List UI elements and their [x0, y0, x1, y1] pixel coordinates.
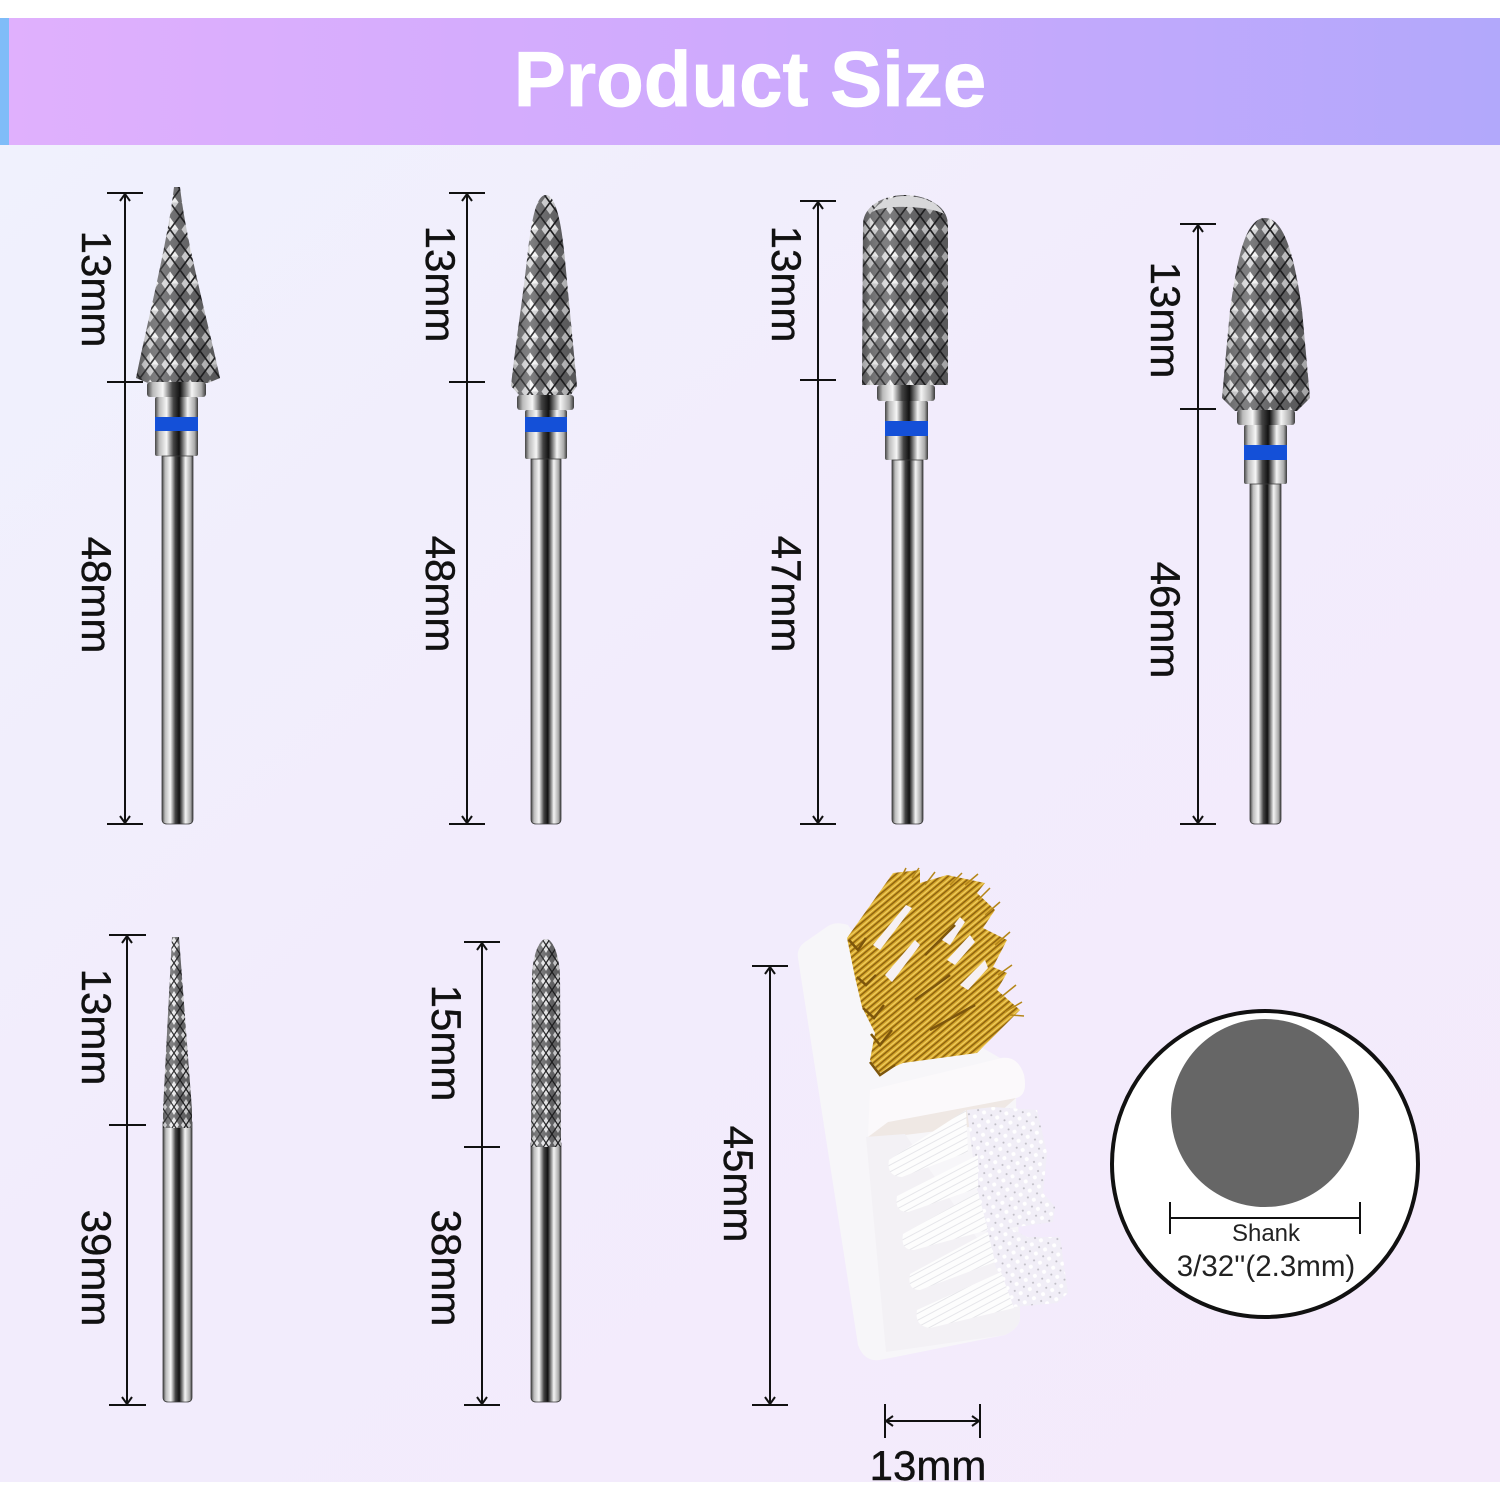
label: 15mm: 15mm	[423, 985, 470, 1101]
drill bit 5: needle	[163, 937, 192, 1402]
drill bit 6: slim cylinder	[531, 939, 561, 1402]
brush neck overhang	[868, 1058, 1025, 1137]
label: 39mm: 39mm	[73, 1210, 120, 1326]
gold bristle gaps	[873, 905, 988, 990]
label: 13mm: 13mm	[417, 226, 464, 342]
label: 47mm: 47mm	[763, 536, 810, 652]
nylon bristles	[889, 1110, 1014, 1328]
label: 13mm: 13mm	[763, 226, 810, 342]
gold bristle tips	[900, 868, 1024, 1016]
translucent bristle tips	[967, 1107, 1068, 1307]
lower plate	[866, 1134, 1020, 1352]
label: 13mm: 13mm	[73, 231, 120, 347]
title: Product Size	[514, 35, 986, 123]
drill bit 1: tall cone	[136, 187, 220, 824]
shank measure	[1170, 1202, 1360, 1234]
shank cross-section	[1171, 1019, 1359, 1207]
header banner	[0, 18, 1500, 145]
brush body	[798, 923, 1025, 1360]
drill bit 2: tapered flame	[511, 195, 577, 824]
drill bit 3: rounded cylinder	[862, 195, 948, 824]
dimension: brush width	[870, 1404, 986, 1489]
label: 46mm: 46mm	[1142, 562, 1189, 678]
gold bristles	[847, 870, 1020, 1073]
label: 45mm: 45mm	[715, 1126, 762, 1242]
label: 48mm: 48mm	[73, 537, 120, 653]
shank diameter diagram	[1112, 1011, 1418, 1317]
dimension: bit 4	[1142, 224, 1216, 824]
label: 13mm: 13mm	[1142, 262, 1189, 378]
cleaning brush	[798, 868, 1068, 1360]
label: 48mm: 48mm	[417, 536, 464, 652]
label: 13mm: 13mm	[870, 1442, 986, 1489]
drill bit 4: wide flame	[1222, 218, 1310, 824]
dimension: brush height	[715, 966, 788, 1405]
dimension: bit 2	[417, 193, 485, 824]
gold bristle shadows	[849, 925, 975, 1075]
label: 13mm: 13mm	[73, 969, 120, 1085]
dimension: bit 1	[73, 193, 143, 824]
dimension: bit 5	[73, 935, 146, 1405]
label: Shank: Shank	[1232, 1220, 1301, 1247]
dimension: bit 6	[423, 942, 500, 1405]
dimension: bit 3	[763, 201, 836, 824]
label: 38mm: 38mm	[423, 1210, 470, 1326]
label: shank diameter: 3/32''(2.3mm)	[1177, 1250, 1355, 1283]
